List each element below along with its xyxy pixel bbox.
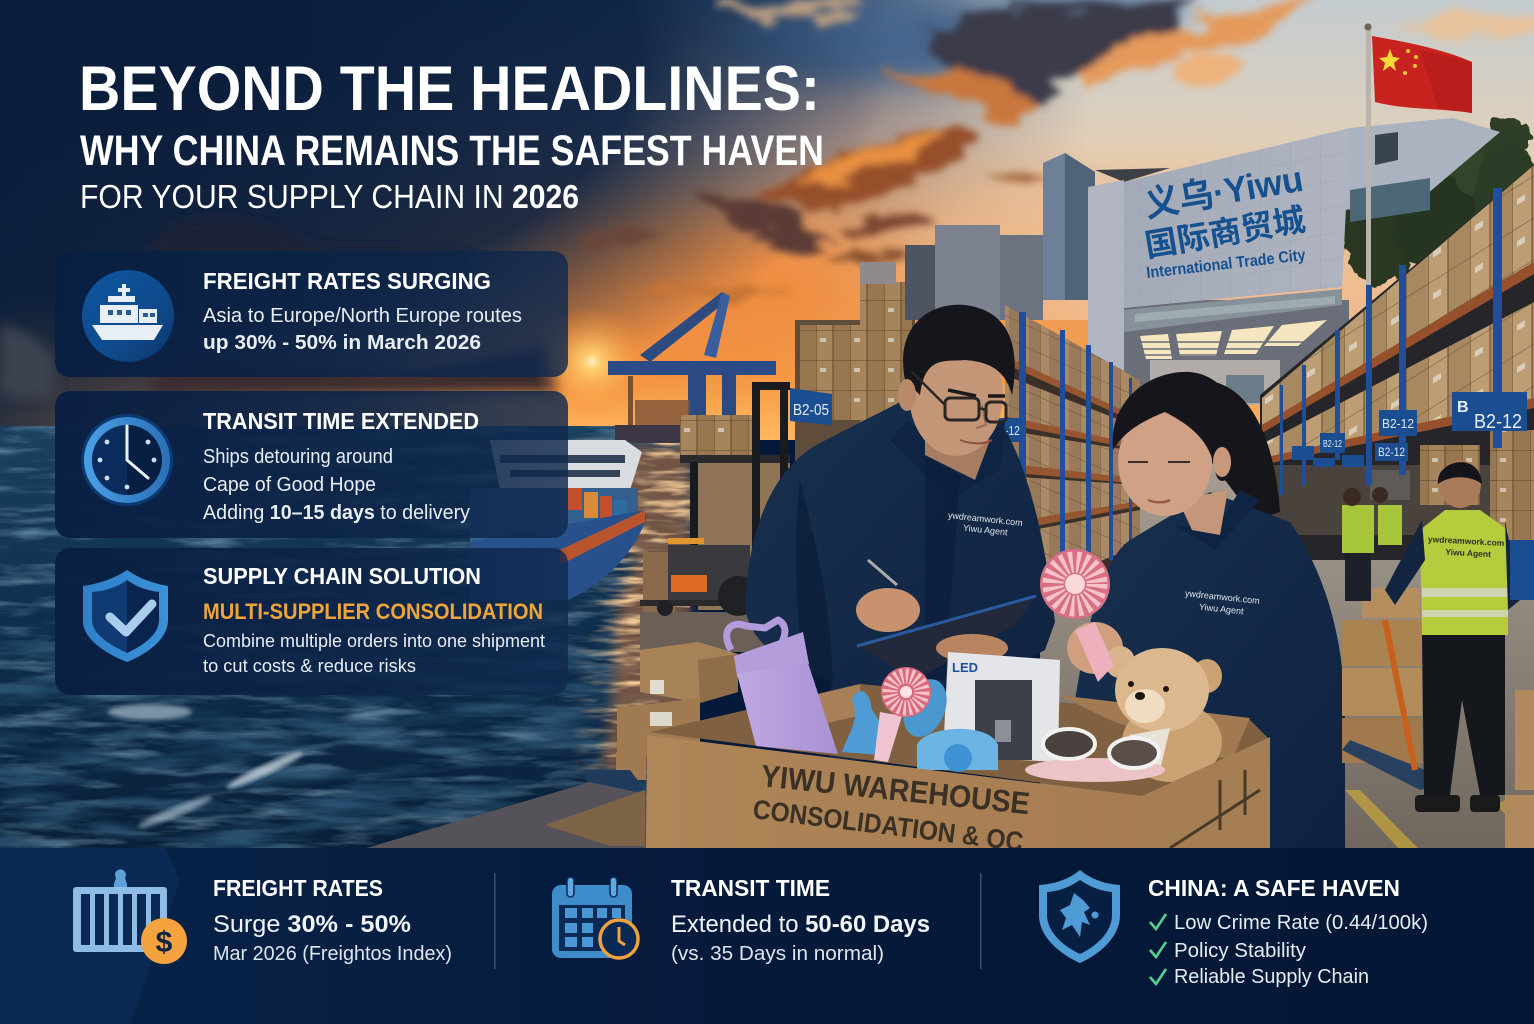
dock floor xyxy=(360,782,650,850)
box lettering: YIWU WAREHOUSE xyxy=(759,758,1031,821)
title: BEYOND THE HEADLINES: xyxy=(79,54,820,124)
orange subheading: MULTI-SUPPLIER CONSOLIDATION xyxy=(203,599,543,624)
small cartons left of main box xyxy=(583,642,738,790)
panel: freight rates surging xyxy=(55,251,568,377)
icon: clock xyxy=(81,414,173,506)
stat: China safe haven xyxy=(1039,870,1428,988)
building sign xyxy=(1141,158,1308,282)
body text: Combine multiple orders into one shipment xyxy=(203,630,545,651)
background workers xyxy=(1342,487,1534,850)
sea xyxy=(0,426,690,850)
bottle xyxy=(727,620,838,754)
body text xyxy=(203,630,545,676)
trees xyxy=(1342,118,1534,284)
checklist: Policy Stability xyxy=(1174,940,1306,962)
supporting hand xyxy=(936,634,1008,662)
body text: Cape of Good Hope xyxy=(203,473,376,496)
jacket logo on woman: ywdreamwork.com xyxy=(1184,588,1260,606)
forklift xyxy=(640,382,790,652)
sunglasses and pink fabric xyxy=(1025,729,1165,782)
stat heading: TRANSIT TIME xyxy=(671,875,830,901)
box lettering: CONSOLIDATION & QC xyxy=(751,794,1025,857)
heading: TRANSIT TIME EXTENDED xyxy=(203,408,479,434)
rack location signs: B2-12 xyxy=(1323,439,1342,450)
worker in hi-vis vest: ywdreamwork.com xyxy=(1428,534,1505,548)
stat: transit time xyxy=(552,875,930,965)
background: sunset sky xyxy=(0,0,1534,440)
jacket logo on man: ywdreamwork.com xyxy=(947,510,1023,528)
writing hand xyxy=(856,588,920,632)
jacket logo on woman xyxy=(1184,588,1260,616)
stat heading: CHINA: A SAFE HAVEN xyxy=(1148,875,1400,901)
panel: transit time extended xyxy=(55,391,568,538)
worker in hi-vis vest: Yiwu Agent xyxy=(1445,547,1491,559)
large hand-held fan xyxy=(1040,549,1114,682)
flagpole and Chinese flag xyxy=(1364,23,1472,293)
rack location signs: B xyxy=(1457,399,1469,416)
aisle sign B2-05: B2-05 xyxy=(793,402,829,419)
panel: supply chain solution xyxy=(55,548,568,695)
tall tower building xyxy=(1043,153,1095,300)
heading: FREIGHT RATES SURGING xyxy=(203,268,491,294)
icon: container with dollar coin xyxy=(73,869,187,964)
rack location signs: B2-12 xyxy=(1474,411,1522,433)
jacket logo on man: Yiwu Agent xyxy=(963,523,1009,537)
title xyxy=(79,54,824,215)
rack location signs: B2-12 xyxy=(1378,445,1405,459)
right warehouse racking xyxy=(1260,165,1534,560)
box lettering xyxy=(751,758,1031,857)
port crane xyxy=(608,292,776,443)
title: WHY CHINA REMAINS THE SAFEST HAVEN xyxy=(80,127,824,175)
man inspector writing on clipboard xyxy=(745,305,1055,760)
body text xyxy=(203,304,522,354)
stat: freight rates xyxy=(73,869,452,965)
building sign: 义乌·Yiwu xyxy=(1141,158,1306,225)
box interior xyxy=(650,684,1268,796)
carton handling marks xyxy=(1170,770,1260,848)
checklist xyxy=(1150,912,1428,988)
box front face xyxy=(646,735,1142,848)
teddy bear xyxy=(1105,646,1222,782)
rack location signs: B2-12 xyxy=(1382,416,1414,431)
heading: SUPPLY CHAIN SOLUTION xyxy=(203,563,481,589)
bottom band xyxy=(0,848,1534,1024)
building sign: 国际商贸城 xyxy=(1142,201,1308,264)
icon: shield with China map xyxy=(1039,870,1120,963)
shelving and cartons behind man xyxy=(795,225,1043,500)
small fan xyxy=(874,667,931,762)
icon: container with dollar coin: $ xyxy=(156,926,173,959)
stat note: Mar 2026 (Freightos Index) xyxy=(213,943,452,965)
checklist: Low Crime Rate (0.44/100k) xyxy=(1174,912,1428,934)
checklist: Reliable Supply Chain xyxy=(1174,966,1369,988)
icon: calendar with clock xyxy=(552,877,638,958)
jacket logo on woman: Yiwu Agent xyxy=(1199,602,1245,616)
rack location signs xyxy=(1292,392,1527,467)
body text: Asia to Europe/North Europe routes xyxy=(203,304,522,327)
stat value: Surge 30% - 50% xyxy=(213,911,411,938)
woman's hand xyxy=(1067,622,1123,674)
container ship xyxy=(470,440,646,600)
main cardboard consolidation box xyxy=(646,620,1270,857)
left warehouse racking between workers: B2-12 xyxy=(992,423,1020,438)
blue toys xyxy=(842,673,998,772)
stat note: (vs. 35 Days in normal) xyxy=(671,943,884,965)
building sign: International Trade City xyxy=(1146,247,1307,282)
clipboard xyxy=(857,596,1036,680)
stat value: Extended to 50-60 Days xyxy=(671,911,930,938)
title: FOR YOUR SUPPLY CHAIN IN 2026 xyxy=(80,178,579,215)
LED product box: LED xyxy=(952,660,978,675)
body text xyxy=(203,445,471,524)
icon: cargo ship xyxy=(82,270,174,362)
LED product box xyxy=(943,652,1060,762)
Yiwu International Trade City building xyxy=(1088,118,1500,405)
jacket logo on man xyxy=(947,510,1023,537)
man's head xyxy=(898,305,1015,480)
aisle sign B2-05 xyxy=(790,388,832,425)
icon: shield with check xyxy=(83,570,168,662)
left warehouse racking between workers xyxy=(990,305,1140,640)
clouds xyxy=(0,0,1534,418)
worker in hi-vis vest xyxy=(1342,460,1520,812)
stat heading: FREIGHT RATES xyxy=(213,875,383,901)
box right face xyxy=(1142,737,1270,848)
pen xyxy=(868,560,897,585)
body text: up 30% - 50% in March 2026 xyxy=(203,331,481,354)
body text: Adding 10–15 days to delivery xyxy=(203,501,471,524)
body text: Ships detouring around xyxy=(203,445,393,468)
woman inspector xyxy=(1067,372,1345,848)
warehouse floor right xyxy=(1040,450,1534,850)
body text: to cut costs & reduce risks xyxy=(203,655,416,676)
